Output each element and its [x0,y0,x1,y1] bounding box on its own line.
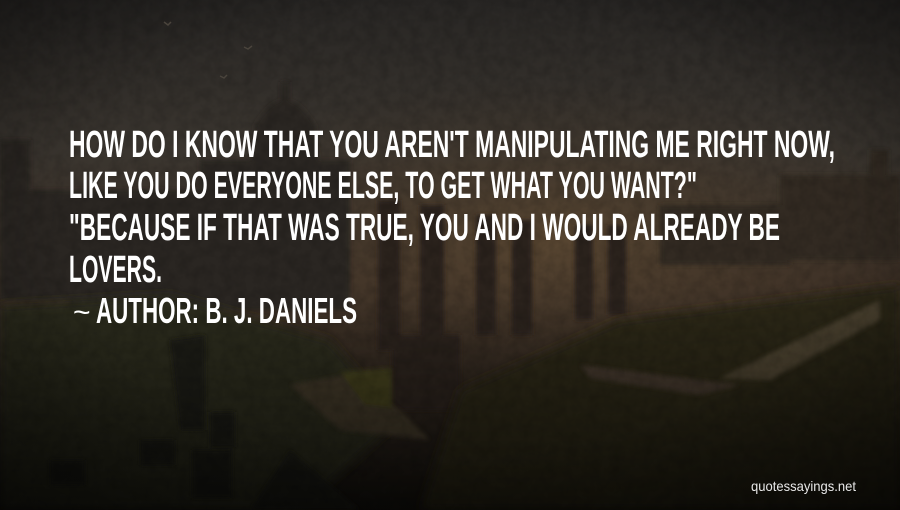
tilde: ~ [73,296,91,329]
background: paths [290,300,880,440]
author line [73,290,357,331]
background: green ground left [0,295,400,510]
quote text [69,124,835,291]
background: foreground ruins [50,335,360,510]
background: ruined columns [378,200,626,410]
background: warm glow [100,80,900,400]
quote text: LOVERS. [69,249,162,291]
author name: AUTHOR: B. J. DANIELS [96,290,357,331]
background: distant buildings right [660,150,900,265]
watermark: quotessayings.net [751,478,856,494]
background: ground right [420,285,900,510]
background: foreground shade [0,300,900,510]
background: distant buildings left [0,82,350,310]
icon: birds [164,22,252,78]
